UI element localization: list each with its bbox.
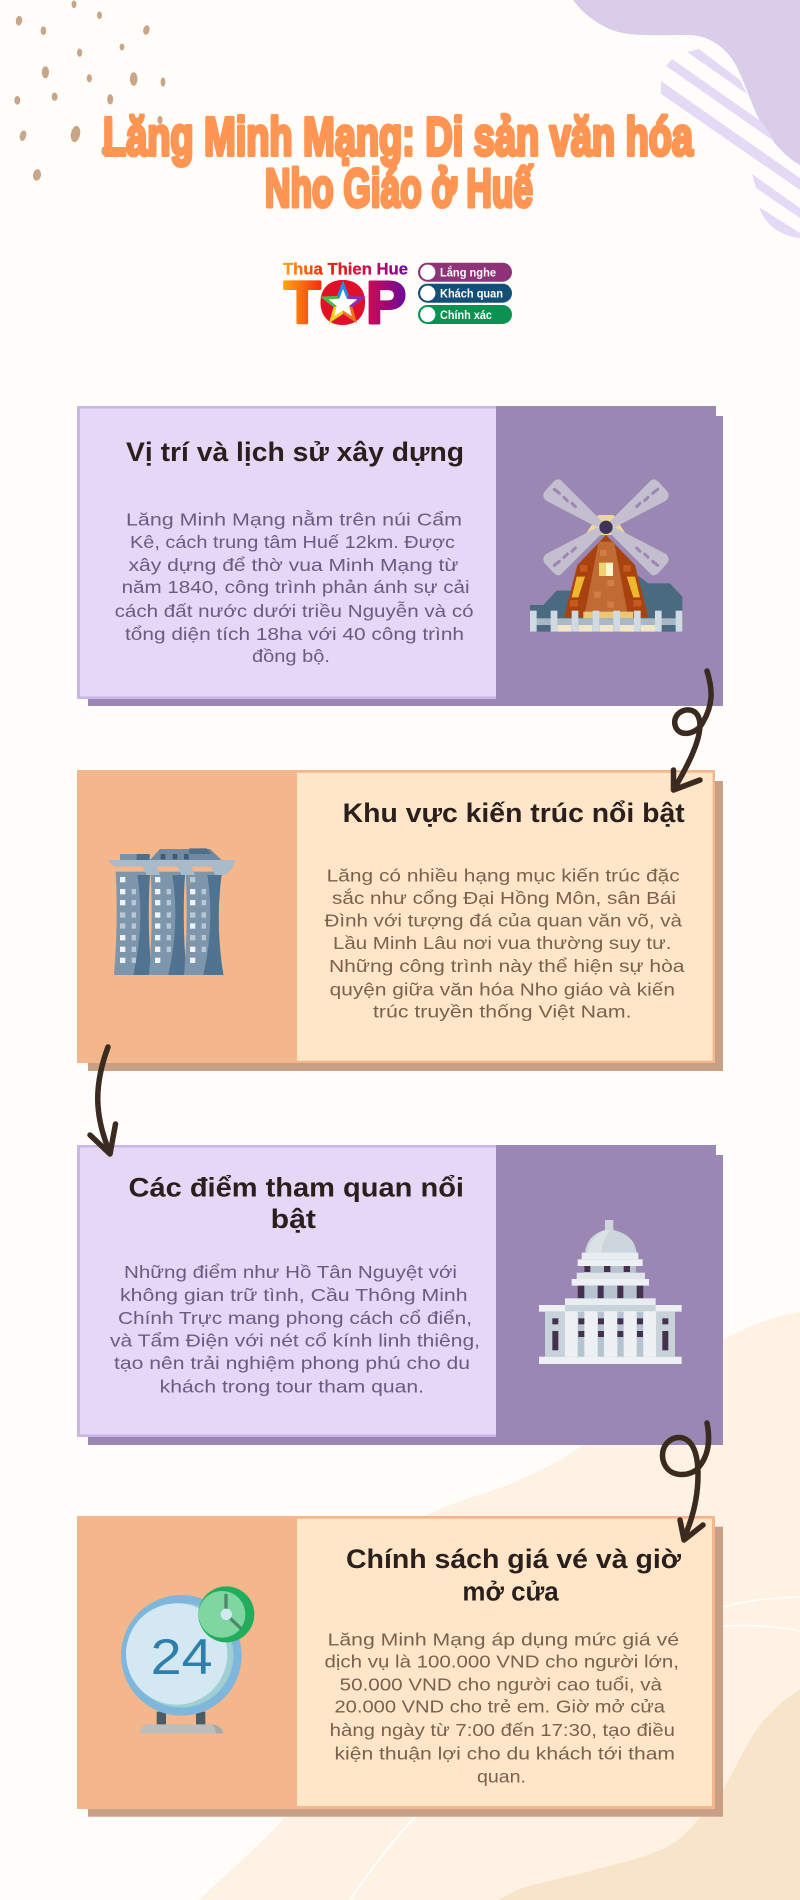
- heading: Vị trí và lịch sử xây dựng: [126, 437, 464, 467]
- body text: quan.: [477, 1766, 526, 1786]
- heading: Các điểm tham quan nổi: [128, 1173, 464, 1203]
- logo pill: Lắng nghe: [418, 263, 512, 282]
- logo pill: Khách quan: Khách quan: [440, 287, 503, 301]
- body text: 50.000 VND cho người cao tuổi, và: [340, 1674, 662, 1694]
- arrow: panel 1 to panel 2: [674, 671, 711, 790]
- panel: vị trí và lịch sử xây dựng: [77, 406, 723, 706]
- logo: Thua Thien Hue TOP: [283, 260, 512, 336]
- title: Nho Giáo ở Huế: [265, 159, 534, 219]
- arrow: panel 2 to panel 3: [90, 1047, 116, 1154]
- body text: Lăng Minh Mạng áp dụng mức giá vé: [328, 1629, 679, 1649]
- logo pill: Chính xác: [418, 305, 512, 324]
- logo pill: Lắng nghe: Lắng nghe: [440, 265, 496, 280]
- body text: trúc truyền thống Việt Nam.: [373, 1002, 632, 1022]
- title: [103, 107, 694, 219]
- body text: cách đất nước dưới triều Nguyễn và có: [115, 600, 474, 621]
- heading: mở cửa: [462, 1577, 559, 1607]
- body text: dịch vụ là 100.000 VND cho người lớn,: [324, 1652, 679, 1672]
- body text: Những công trình này thể hiện sự hòa: [329, 956, 685, 976]
- body text: Lăng có nhiều hạng mục kiến trúc đặc: [327, 866, 680, 886]
- body text: và Tẩm Điện với nét cổ kính linh thiêng,: [110, 1331, 480, 1351]
- body text: xây dựng để thờ vua Minh Mạng từ: [128, 555, 459, 575]
- body text: Đình với tượng đá của quan văn võ, và: [324, 911, 682, 931]
- heading: Khu vực kiến trúc nổi bật: [343, 798, 685, 828]
- icon: windmill: [530, 479, 682, 632]
- body text: năm 1840, công trình phản ánh sự cải: [122, 577, 470, 597]
- background blob: bottom right peach: [199, 1312, 800, 1900]
- heading: bật: [271, 1204, 316, 1234]
- body text: khách trong tour tham quan.: [160, 1377, 424, 1397]
- body text: [324, 1629, 679, 1786]
- body text: Kê, cách trung tâm Huế 12km. Được: [130, 532, 455, 552]
- body text: [110, 1262, 480, 1397]
- heading: [346, 1544, 681, 1607]
- body text: sắc như cổng Đại Hồng Môn, sân Bái: [332, 887, 676, 908]
- heading: [128, 1173, 464, 1234]
- body text: Chính Trực mang phong cách cổ điển,: [118, 1308, 472, 1328]
- icon: capitol building: [539, 1220, 682, 1364]
- logo wordmark: TOP: [284, 270, 406, 336]
- body text: 20.000 VND cho trẻ em. Giờ mở cửa: [334, 1697, 665, 1717]
- arrow: panel 3 to panel 4: [663, 1423, 709, 1540]
- body text: Những điểm như Hồ Tân Nguyệt với: [124, 1262, 457, 1282]
- body text: [115, 509, 474, 666]
- panel: chính sách giá vé và giờ mở cửa: [77, 1516, 723, 1817]
- icon: 24-hour clock sign: [121, 1586, 254, 1733]
- logo pill: Khách quan: [418, 284, 512, 303]
- body text: không gian trữ tình, Cầu Thông Minh: [120, 1285, 468, 1305]
- body text: quyện giữa văn hóa Nho giáo và kiến: [330, 980, 675, 1000]
- logo wordmark: Thua Thien Hue: [283, 260, 408, 279]
- body text: Lầu Minh Lâu nơi vua thường suy tư.: [333, 933, 672, 953]
- heading: Chính sách giá vé và giờ: [346, 1544, 681, 1574]
- body text: kiện thuận lợi cho du khách tới tham: [334, 1743, 675, 1763]
- body text: tổng diện tích 18ha với 40 công trình: [125, 624, 464, 644]
- logo star badge: [320, 280, 366, 325]
- body text: Lăng Minh Mạng nằm trên núi Cẩm: [126, 509, 462, 530]
- icon: towers: [108, 848, 235, 975]
- background blob: top right purple: [573, 0, 800, 238]
- body text: [324, 866, 685, 1022]
- body text: đồng bộ.: [252, 646, 330, 666]
- panel: các điểm tham quan nổi bật: [77, 1145, 723, 1445]
- panel: khu vực kiến trúc nổi bật: [77, 770, 723, 1071]
- body text: tạo nên trải nghiệm phong phú cho du: [114, 1353, 470, 1373]
- icon: 24-hour clock sign: 24: [151, 1629, 213, 1685]
- decorative dots: top left: [14, 1, 165, 181]
- body text: hàng ngày từ 7:00 đến 17:30, tạo điều: [330, 1720, 675, 1740]
- logo pill: Chính xác: Chính xác: [440, 308, 492, 322]
